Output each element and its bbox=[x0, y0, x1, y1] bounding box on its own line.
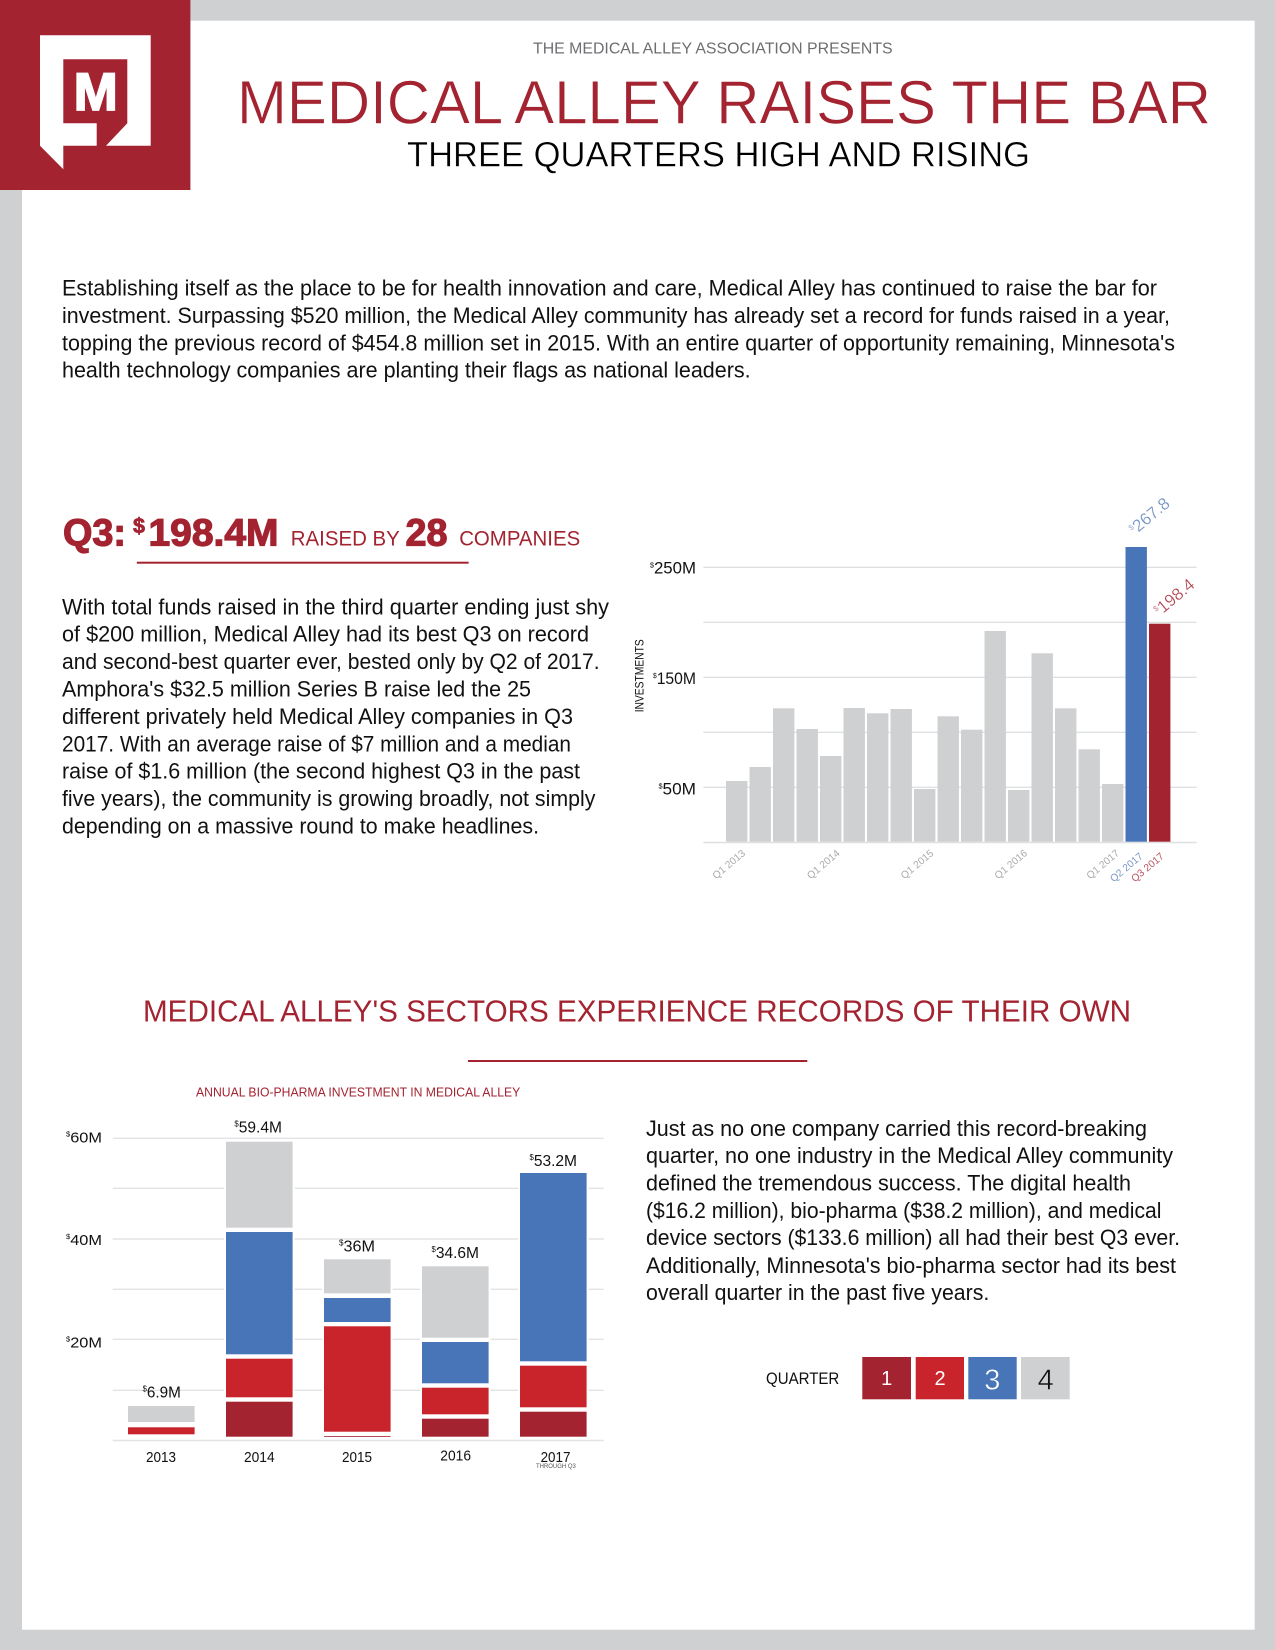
bar halos bbox=[126, 1140, 589, 1438]
legend: quarter: 3 bbox=[984, 1364, 1000, 1396]
Q3 paragraph: 2017. With an average raise of $7 million and a median bbox=[62, 731, 571, 756]
x axis labels: Q1 2014 bbox=[805, 848, 843, 882]
y axis labels: 40M bbox=[70, 1232, 102, 1249]
Q3 paragraph: Amphora's $32.5 million Series B raise led the 25 bbox=[62, 677, 531, 702]
Q3 heading: 28 bbox=[406, 513, 448, 555]
y axis labels: $ bbox=[658, 783, 663, 790]
value label: Q3 2017: 198.4 bbox=[1153, 575, 1198, 617]
intro paragraph: Establishing itself as the place to be for health innovation and care, Medical Alley has continued to raise the bar for bbox=[62, 276, 1158, 301]
x axis labels: Q3 2017 bbox=[1130, 851, 1167, 885]
intro paragraph bbox=[62, 276, 1175, 383]
bar totals: $ bbox=[143, 1384, 147, 1394]
title: MEDICAL ALLEY RAISES THE BAR bbox=[237, 68, 1211, 136]
intro paragraph: topping the previous record of $454.8 million set in 2015. With an entire quarter of opportunity remaining, Minnesota's bbox=[62, 330, 1175, 355]
y axis labels bbox=[650, 559, 696, 798]
logo: M bbox=[74, 63, 118, 122]
Q3 heading: 198.4M bbox=[148, 513, 278, 555]
x axis labels: Q1 2016 bbox=[993, 848, 1030, 882]
sector paragraph: Additionally, Minnesota's bio-pharma sector had its best bbox=[646, 1253, 1177, 1278]
x axis labels: 2013 bbox=[146, 1449, 176, 1466]
bar totals: 36M bbox=[344, 1238, 375, 1256]
Q3 heading: $ bbox=[133, 515, 145, 538]
x axis labels bbox=[711, 848, 1167, 885]
bar totals: 59.4M bbox=[239, 1120, 282, 1136]
y axis labels: $ bbox=[66, 1234, 70, 1241]
bar totals: $ bbox=[432, 1245, 436, 1254]
bar: 2015 bbox=[324, 1259, 391, 1437]
value label: Q2 2017: $ bbox=[1127, 522, 1136, 532]
y axis labels: 60M bbox=[70, 1130, 102, 1147]
sector paragraph: ($16.2 million), bio-pharma ($38.2 million), and medical bbox=[646, 1198, 1162, 1223]
Q3 paragraph: depending on a massive round to make headlines. bbox=[62, 814, 539, 839]
bar totals: $ bbox=[339, 1238, 344, 1248]
Q3 paragraph bbox=[62, 594, 610, 839]
x axis labels: Q1 2015 bbox=[899, 848, 936, 882]
y axis labels: 150M bbox=[657, 670, 696, 688]
Q3 paragraph: raise of $1.6 million (the second highest Q3 in the past bbox=[62, 759, 581, 784]
Q3 heading bbox=[63, 513, 580, 564]
x axis labels: 2015 bbox=[342, 1449, 372, 1466]
bar totals: 53.2M bbox=[534, 1153, 577, 1170]
intro paragraph: investment. Surpassing $520 million, the Medical Alley community has already set a record for funds raised in a year, bbox=[62, 303, 1170, 328]
y axis labels: $ bbox=[66, 1132, 70, 1139]
logo bbox=[0, 0, 190, 190]
subtitle: THREE QUARTERS HIGH AND RISING bbox=[407, 136, 1030, 174]
sector paragraph: Just as no one company carried this record-breaking bbox=[646, 1116, 1147, 1141]
sector paragraph bbox=[646, 1116, 1180, 1305]
legend: quarter: 4 bbox=[1038, 1364, 1054, 1396]
Q3 heading: COMPANIES bbox=[459, 528, 580, 551]
Q3 paragraph: With total funds raised in the third quarter ending just shy bbox=[62, 594, 610, 619]
Q3 paragraph: different privately held Medical Alley companies in Q3 bbox=[62, 704, 573, 729]
bar: 2014 bbox=[226, 1142, 293, 1437]
bar totals: 34.6M bbox=[436, 1245, 479, 1262]
bar totals: $ bbox=[234, 1120, 239, 1128]
x axis labels: Q1 2017 bbox=[1085, 848, 1122, 882]
bar: 2013 bbox=[128, 1406, 195, 1434]
x axis labels: 2017 bbox=[541, 1449, 570, 1466]
x axis labels: Q2 2017 bbox=[1108, 851, 1146, 885]
y axis labels bbox=[66, 1130, 102, 1352]
legend: quarter: 1 bbox=[881, 1368, 892, 1390]
bar totals: $ bbox=[530, 1153, 534, 1162]
sector paragraph: device sectors ($133.6 million) all had their best Q3 ever. bbox=[646, 1225, 1180, 1250]
y axis labels: 20M bbox=[70, 1335, 102, 1352]
y axis labels: 250M bbox=[654, 559, 696, 577]
Q3 paragraph: and second-best quarter ever, bested only by Q2 of 2017. bbox=[62, 649, 600, 674]
sector paragraph: quarter, no one industry in the Medical Alley community bbox=[646, 1143, 1174, 1168]
legend: quarter: QUARTER bbox=[766, 1370, 839, 1388]
x axis labels: 2014 bbox=[244, 1449, 275, 1466]
x axis labels: 2016 bbox=[440, 1448, 471, 1464]
bar totals: 6.9M bbox=[147, 1384, 181, 1402]
Q3 paragraph: of $200 million, Medical Alley had its best Q3 on record bbox=[62, 622, 589, 647]
Q3 heading: RAISED BY bbox=[291, 528, 400, 551]
Q3 heading: Q3: bbox=[63, 513, 126, 555]
header: presenter line: THE MEDICAL ALLEY ASSOCIATION PRESENTS bbox=[533, 40, 893, 57]
Q3 paragraph: five years), the community is growing broadly, not simply bbox=[62, 786, 596, 811]
intro paragraph: health technology companies are planting their flags as national leaders. bbox=[62, 358, 751, 383]
y axis title: INVESTMENTS bbox=[635, 639, 647, 712]
x axis labels: THROUGH Q3 bbox=[536, 1464, 576, 1470]
y axis labels: $ bbox=[650, 562, 654, 569]
legend: quarter bbox=[766, 1357, 1070, 1399]
bar: 2017 bbox=[520, 1173, 587, 1437]
sector heading: MEDICAL ALLEY'S SECTORS EXPERIENCE RECORDS OF THEIR OWN bbox=[143, 994, 1131, 1029]
bar totals bbox=[143, 1120, 577, 1402]
bar chart: quarterly investments bbox=[635, 494, 1198, 885]
bar: 2016 bbox=[422, 1266, 489, 1437]
chart title: ANNUAL BIO-PHARMA INVESTMENT IN MEDICAL ALLEY bbox=[196, 1086, 521, 1100]
x axis labels: Q1 2013 bbox=[711, 848, 748, 882]
y axis labels: $ bbox=[66, 1337, 70, 1344]
sector paragraph: overall quarter in the past five years. bbox=[646, 1280, 989, 1305]
sector paragraph: defined the tremendous success. The digital health bbox=[646, 1170, 1131, 1196]
x axis labels bbox=[146, 1448, 576, 1470]
y axis labels: $ bbox=[653, 673, 657, 680]
value label: Q3 2017: $ bbox=[1151, 603, 1161, 614]
value label: Q2 2017: 267.8 bbox=[1129, 494, 1174, 536]
y axis labels: 50M bbox=[663, 780, 696, 798]
legend: quarter: 2 bbox=[934, 1368, 946, 1390]
stacked bar chart: annual bio-pharma investment bbox=[66, 1086, 604, 1470]
